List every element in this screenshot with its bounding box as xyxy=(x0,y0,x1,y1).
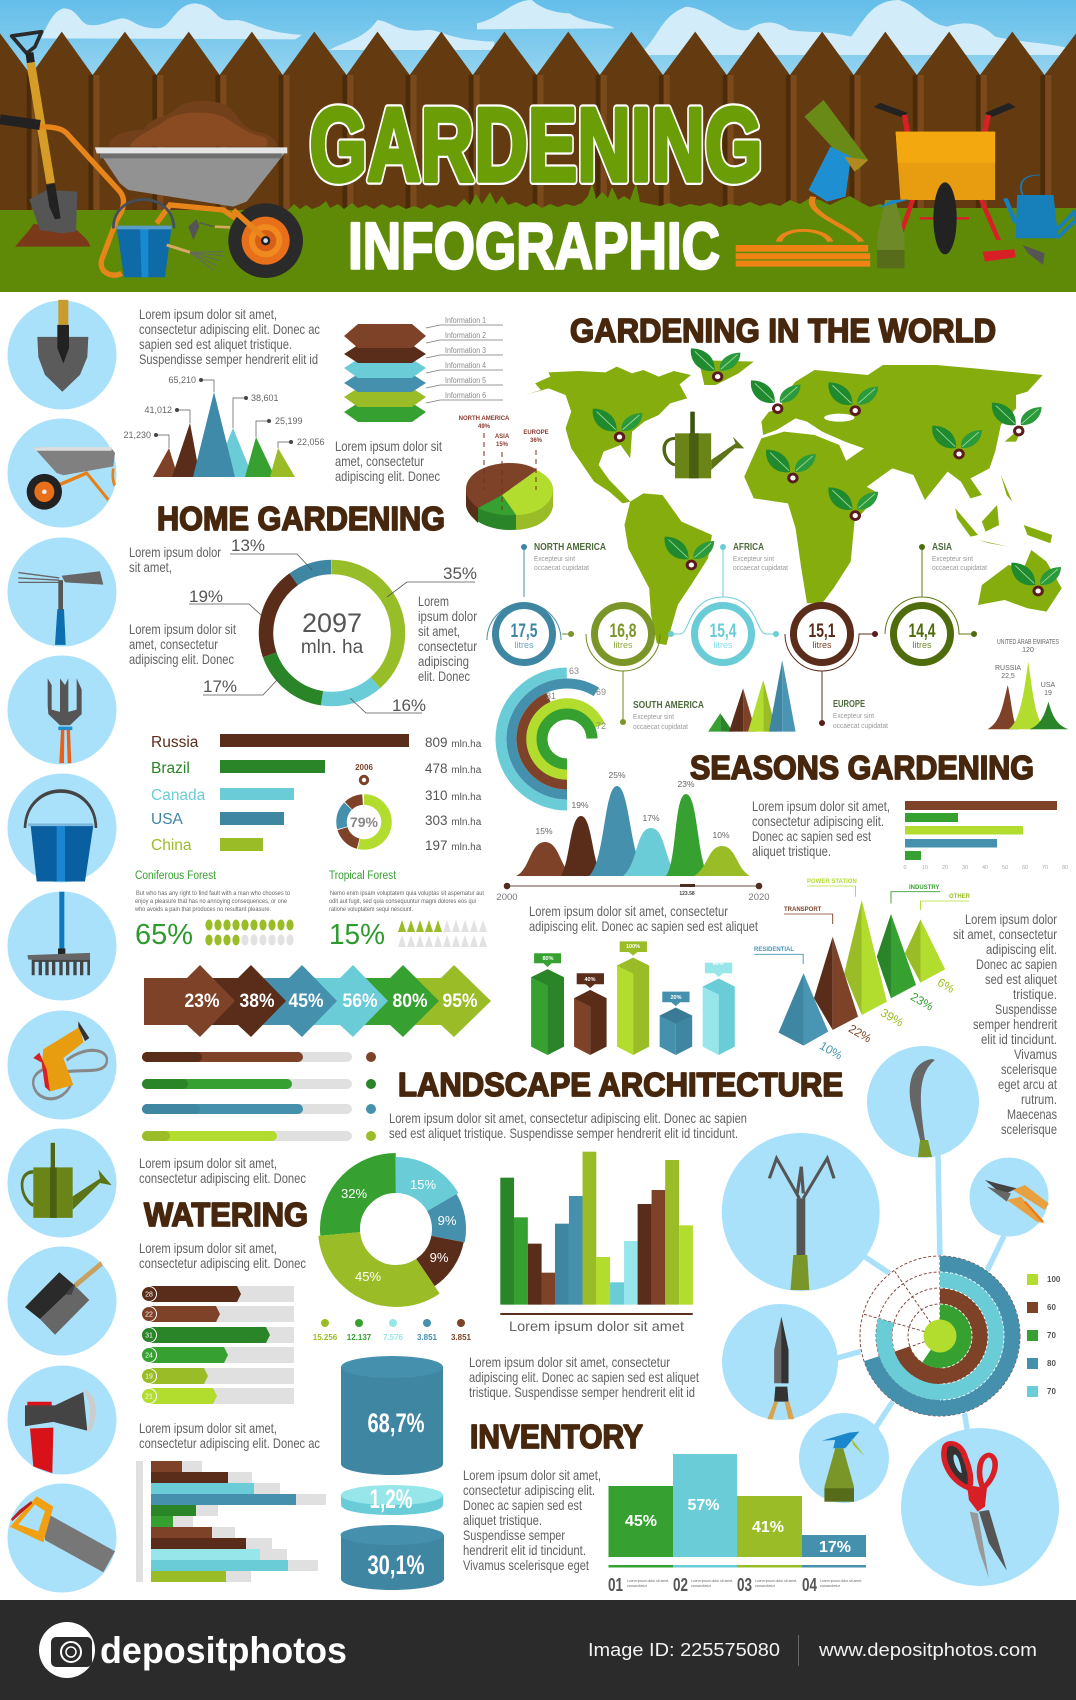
right aligned text block: scelerisque xyxy=(1001,1121,1057,1137)
heading: Landscape Architecture: LANDSCAPE ARCHITECTURE xyxy=(398,1067,843,1104)
exploded donut chart: 9% xyxy=(430,1250,449,1265)
text blocks around donut: adipiscing elit. Donec xyxy=(129,651,234,667)
text block below watering: Lorem ipsum dolor sit amet, xyxy=(139,1240,277,1256)
right aligned text block: scelerisque xyxy=(1001,1061,1057,1077)
fence xyxy=(0,32,1076,213)
continent labels: ASIA xyxy=(932,542,952,553)
connector lines xyxy=(830,1155,1004,1435)
connectors and dots xyxy=(487,547,974,723)
arrow percentage chain xyxy=(144,965,491,1037)
tropical forest panel: odit aut fugit, sed quia consequuntur magni dolores eos qui xyxy=(329,898,476,905)
concentric radial bar chart: 72 xyxy=(596,721,606,731)
donut legend xyxy=(313,1319,472,1342)
step bar chart: 04 xyxy=(802,1575,817,1595)
continent labels xyxy=(534,542,987,731)
donut chart: 2097 mln ha: 2097 xyxy=(302,608,362,638)
ring values: 15,1 xyxy=(808,621,836,642)
bell curve chart 2000-2020: 2000 xyxy=(496,892,518,903)
continent labels: Excepteur sint xyxy=(733,556,774,563)
concentric radial bar chart: 69 xyxy=(596,687,606,697)
target legend: 80 xyxy=(1047,1359,1056,1368)
pyramid chart: 22% xyxy=(846,1021,874,1046)
text block above watering xyxy=(139,1155,306,1186)
horizontal comparison bars xyxy=(136,1461,326,1582)
cylinder chart: 68,7% xyxy=(368,1408,424,1438)
plant markers xyxy=(593,348,1061,596)
litres ring row xyxy=(487,544,977,726)
text block above stacked bars: consectetur adipiscing elit. Donec ac xyxy=(139,1435,320,1451)
country bars: 478 mln.ha xyxy=(425,761,482,776)
peak chart: countries: 22,5 xyxy=(1001,673,1015,680)
peak chart: countries: 19 xyxy=(1044,690,1052,697)
horizontal bar chart: seasons: 70 xyxy=(1042,865,1048,871)
text block above stacked bars xyxy=(139,1420,320,1451)
pyramid chart: 39% xyxy=(878,1005,906,1030)
text block: seasons: Lorem ipsum dolor sit amet, xyxy=(752,798,890,814)
arrow bars with numbered badges xyxy=(142,1286,294,1404)
arrow percentage chain: 56% xyxy=(342,991,378,1012)
icons: nozzle, watering can, spade, axe, saw xyxy=(10,1021,115,1572)
layered hexagon stack with information labels: Information 6 xyxy=(445,391,486,400)
mountain chart with values: 22,056 xyxy=(297,437,325,447)
horizontal bar chart: seasons: 20 xyxy=(942,865,948,871)
text blocks around donut: adipiscing xyxy=(418,653,469,669)
mountain chart with values: 25,199 xyxy=(275,416,303,426)
horizontal bar chart: seasons: 60 xyxy=(1022,865,1028,871)
horizontal bar chart: seasons: 10 xyxy=(922,865,928,871)
country bars: Russia xyxy=(151,734,199,751)
donut chart: 2097 mln ha: 19% xyxy=(189,587,223,606)
arrow bars with numbered badges: 28 xyxy=(145,1292,153,1298)
text block below watering: consectetur adipiscing elit. Donec xyxy=(139,1255,306,1271)
text block: seasons: consectetur adipiscing elit. xyxy=(752,813,884,829)
horizontal bar chart: seasons xyxy=(903,801,1068,871)
donut legend: 7.576 xyxy=(383,1333,404,1342)
3D pie chart: 49% xyxy=(478,424,491,430)
text block: seasons: Donec ac sapien sed est xyxy=(752,828,871,844)
text blocks around donut: amet, consectetur xyxy=(129,636,218,652)
text block: intro xyxy=(139,306,320,367)
coniferous forest panel: Coniferous Forest xyxy=(135,870,217,882)
3D column chart xyxy=(531,941,735,1055)
coniferous forest panel: But who has any right to find fault with a man who chooses to xyxy=(136,890,290,897)
country bars: Brazil xyxy=(151,760,190,777)
target legend xyxy=(1027,1274,1061,1397)
3D column chart: 20% xyxy=(670,995,682,1001)
text block above columns: adipiscing elit. Donec ac sapien sed est aliquet xyxy=(529,918,758,934)
arrow bars with numbered badges: 21 xyxy=(145,1394,153,1400)
text block: inventory: aliquet tristique. xyxy=(463,1512,542,1528)
bell curve chart 2000-2020 xyxy=(496,770,770,903)
text block above inventory xyxy=(469,1354,699,1400)
heading: Seasons Gardening: SEASONS GARDENING xyxy=(690,750,1034,787)
concentric radial bar chart: 63 xyxy=(569,666,579,676)
ring values: 15,4 xyxy=(710,621,737,642)
text block: inventory: consectetur adipiscing elit. xyxy=(463,1482,595,1498)
pyramid chart: 6% xyxy=(935,975,957,996)
ring values xyxy=(510,621,936,642)
arrow percentage chain: 95% xyxy=(442,991,478,1012)
step bar chart: 41% xyxy=(752,1519,784,1536)
icon: spray bottle xyxy=(822,1432,865,1502)
peak chart: countries: RUSSIA xyxy=(995,665,1021,672)
cylinder chart: 1,2% xyxy=(370,1484,412,1514)
donut legend: 3.851 xyxy=(417,1333,438,1342)
text blocks around donut: Lorem ipsum dolor xyxy=(129,544,221,560)
step bar chart: consectetur xyxy=(627,1584,648,1588)
litres ring row: litres xyxy=(613,640,633,650)
bell curve chart 2000-2020: 25% xyxy=(608,770,626,780)
continent labels: occaecat cupidatat xyxy=(833,723,888,730)
mountain chart with values xyxy=(123,375,325,477)
donut legend: 12.137 xyxy=(347,1333,372,1342)
tropical forest panel xyxy=(329,870,487,951)
tool circles xyxy=(722,1046,1059,1586)
text block: seasons: aliquet tristique. xyxy=(752,843,831,859)
text block: intro: Lorem ipsum dolor sit amet, xyxy=(139,306,277,322)
concentric radial bar chart xyxy=(501,666,633,805)
text blocks around donut: Lorem xyxy=(418,593,449,609)
donut chart: 2097 mln ha: mln. ha xyxy=(301,637,364,658)
3D pie chart: 36% xyxy=(530,438,543,444)
layered hexagon stack with information labels: Information 3 xyxy=(445,346,486,355)
horizontal bar chart: seasons: 50 xyxy=(1002,865,1008,871)
title: INFOGRAPHIC: INFOGRAPHIC xyxy=(348,208,720,282)
text block under hexagons xyxy=(335,438,442,484)
world map xyxy=(525,348,1062,645)
3D pie chart xyxy=(459,416,553,530)
step bar chart: Lorem ipsum dolor sit amet, xyxy=(820,1579,862,1583)
bell curve chart 2000-2020: 10% xyxy=(712,830,730,840)
tropical forest panel: ratione voluptatem sequi nesciunt. xyxy=(329,906,413,913)
continent labels: occaecat cupidatat xyxy=(733,565,788,572)
concentric progress target xyxy=(859,1255,1021,1417)
pyramid chart: 23% xyxy=(908,989,936,1014)
text blocks around donut: consectetur xyxy=(418,638,477,654)
ring values: 14,4 xyxy=(908,621,936,642)
litres ring row: litres xyxy=(713,640,733,650)
heading: Home Gardening: HOME GARDENING xyxy=(157,501,445,538)
tree pictogram: coniferous xyxy=(205,920,294,946)
step bar chart: Lorem ipsum dolor sit amet, xyxy=(691,1579,733,1583)
text blocks around donut: elit. Donec xyxy=(418,668,470,684)
step bar chart: Lorem ipsum dolor sit amet, xyxy=(755,1579,797,1583)
exploded donut chart: 45% xyxy=(355,1269,381,1284)
peak chart: countries: 120 xyxy=(1022,647,1034,654)
3D column chart: 100% xyxy=(626,944,640,950)
step bar chart: 45% xyxy=(625,1513,657,1530)
country bars: Canada xyxy=(151,787,206,804)
horizontal bar chart: seasons: 80 xyxy=(1062,865,1068,871)
icons: shovel, wheelbarrow, hoe, fork, bucket, rake xyxy=(18,300,115,975)
cylinder chart xyxy=(340,1356,444,1590)
text block above watering: consectetur adipiscing elit. Donec xyxy=(139,1170,306,1186)
logo wordmark: depositphotos xyxy=(100,1630,347,1671)
text block above inventory: adipiscing elit. Donec ac sapien sed est aliquet xyxy=(469,1369,699,1385)
footer bar xyxy=(0,1600,1076,1700)
step bar chart: 17% xyxy=(819,1539,851,1556)
continent labels: Excepteur sint xyxy=(633,714,674,721)
layered hexagon stack with information labels: Information 2 xyxy=(445,331,486,340)
coniferous forest panel xyxy=(134,870,294,951)
header banner xyxy=(0,0,1076,292)
right aligned text block: rutrum. xyxy=(1021,1091,1057,1107)
pyramid chart: POWER STATION xyxy=(807,879,857,885)
step bar chart xyxy=(608,1454,866,1595)
step bar chart: 57% xyxy=(687,1497,720,1514)
3D column chart: 80% xyxy=(542,956,554,962)
text block: landscape: Lorem ipsum dolor sit amet, consectetur adipiscing elit. Donec ac sapien xyxy=(389,1110,747,1126)
text block: inventory: Vivamus scelerisque eget xyxy=(463,1557,589,1573)
country bars: 809 mln.ha xyxy=(425,735,482,750)
bell curve chart 2000-2020: 2020 xyxy=(748,892,770,903)
column of tool icons in circles xyxy=(8,300,116,1592)
bell curve chart 2000-2020: 23% xyxy=(677,779,695,789)
country bars xyxy=(151,734,482,854)
coniferous forest panel: enjoy a pleasure that has no annoying consequences, or one xyxy=(135,898,287,905)
3D pie chart: ASIA xyxy=(495,434,510,440)
arrow bars with numbered badges: 31 xyxy=(145,1332,153,1340)
target legend: 70 xyxy=(1047,1387,1056,1396)
peak chart: countries xyxy=(988,639,1069,729)
arrow percentage chain: 45% xyxy=(288,991,324,1012)
target legend: 70 xyxy=(1047,1331,1056,1340)
title: GARDENING: GARDENING xyxy=(310,88,762,204)
small donut 2006: 79% xyxy=(350,814,379,830)
continent labels: Excepteur sint xyxy=(534,556,575,563)
3D column chart: 40% xyxy=(712,961,724,967)
vertical bar chart xyxy=(500,1152,693,1334)
inland seas xyxy=(824,414,854,422)
right aligned text block: semper hendrerit xyxy=(973,1016,1057,1032)
logo icon xyxy=(39,1622,95,1678)
right aligned text block: Vivamus xyxy=(1014,1046,1057,1062)
horizontal bar chart: seasons: 40 xyxy=(982,865,988,871)
image id: Image ID: 225575080 xyxy=(588,1640,780,1660)
layered hexagon stack with information labels: Information 5 xyxy=(445,376,486,385)
icon: pruner xyxy=(985,1180,1049,1223)
pyramid chart: RESIDENTIAL xyxy=(754,947,794,953)
right aligned text block xyxy=(953,911,1057,1137)
right aligned text block: adipiscing elit. xyxy=(986,941,1057,957)
mountain chart with values: 41,012 xyxy=(144,405,172,415)
country bars: USA xyxy=(151,811,184,828)
ring values: 16,8 xyxy=(610,621,636,642)
country bars: China xyxy=(151,837,192,854)
text blocks around donut: ipsum dolor xyxy=(418,608,477,624)
tree pictogram: tropical xyxy=(398,920,487,947)
text blocks around donut: sit amet, xyxy=(418,623,460,639)
tools on the right of header xyxy=(736,100,1076,268)
text block: inventory xyxy=(463,1467,601,1573)
text block: intro: sapien sed est aliquet tristique. xyxy=(139,336,292,352)
text block above inventory: tristique. Suspendisse semper hendrerit elit id xyxy=(469,1384,695,1400)
right aligned text block: tristique. xyxy=(1013,986,1057,1002)
text block: seasons xyxy=(752,798,890,859)
layered hexagon stack with information labels: Information 4 xyxy=(445,361,486,370)
litres ring row: litres xyxy=(812,640,832,650)
coniferous forest panel: who avoids a pain that produces no resultant pleasure. xyxy=(134,906,271,913)
cylinder chart: 30,1% xyxy=(368,1550,424,1580)
donut legend: 15.256 xyxy=(313,1333,338,1342)
rings xyxy=(496,606,950,662)
text block above columns: Lorem ipsum dolor sit amet, consectetur xyxy=(529,903,728,919)
continent labels: occaecat cupidatat xyxy=(932,565,987,572)
donut chart: 2097 mln ha: 13% xyxy=(231,536,265,555)
watering can on map xyxy=(664,412,744,478)
right aligned text block: eget arcu at xyxy=(998,1076,1057,1092)
text block under hexagons: Lorem ipsum dolor sit xyxy=(335,438,442,454)
target legend: 60 xyxy=(1047,1303,1056,1312)
progress bars xyxy=(142,1052,376,1141)
continent labels: occaecat cupidatat xyxy=(633,724,688,731)
continent labels: NORTH AMERICA xyxy=(534,542,606,553)
text block: intro: consectetur adipiscing elit. Donec ac xyxy=(139,321,320,337)
3D pie chart: NORTH AMERICA xyxy=(459,416,510,422)
exploded donut chart xyxy=(339,1172,457,1286)
small triangle chart xyxy=(708,660,796,732)
text block: inventory: Lorem ipsum dolor sit amet, xyxy=(463,1467,601,1483)
continent labels: EUROPE xyxy=(833,699,865,710)
litres ring row: litres xyxy=(514,640,534,650)
donut legend: 3.851 xyxy=(451,1333,472,1342)
continent labels: Excepteur sint xyxy=(932,556,973,563)
country bars: 197 mln.ha xyxy=(425,838,482,853)
text block: landscape xyxy=(389,1110,747,1141)
arrow percentage chain: 80% xyxy=(392,991,428,1012)
icon: hand rake xyxy=(769,1158,834,1290)
mountain chart with values: 38,601 xyxy=(251,393,279,403)
text block: inventory: Suspendisse semper xyxy=(463,1527,565,1543)
exploded donut chart: 9% xyxy=(438,1213,457,1228)
exploded donut chart: 15% xyxy=(410,1177,436,1192)
right aligned text block: Suspendisse xyxy=(995,1001,1057,1017)
pyramid chart xyxy=(754,879,971,1063)
continent labels: SOUTH AMERICA xyxy=(633,700,704,711)
tropical forest panel: 15% xyxy=(329,919,385,951)
text block: intro: Suspendisse semper hendrerit elit id xyxy=(139,351,318,367)
text blocks around donut xyxy=(129,544,477,684)
lawn xyxy=(0,183,1076,292)
arrow percentage chain: 23% xyxy=(184,991,220,1012)
title: GARDENING: GARDENING xyxy=(310,88,762,204)
pyramid chart: TRANSPORT xyxy=(784,907,822,913)
small donut 2006 xyxy=(342,763,386,844)
exploded donut chart: 32% xyxy=(341,1186,367,1201)
heading: Gardening in the World: GARDENING IN THE WORLD xyxy=(570,313,996,350)
3D pie chart: EUROPE xyxy=(523,430,549,436)
website url: www.depositphotos.com xyxy=(818,1640,1037,1660)
vertical bar chart: Lorem ipsum dolor sit amet xyxy=(509,1318,684,1334)
3D pie chart: 15% xyxy=(496,442,509,448)
pyramid chart: 10% xyxy=(817,1038,845,1063)
continent labels: occaecat cupidatat xyxy=(534,565,589,572)
country bars: 303 mln.ha xyxy=(425,813,482,828)
right aligned text block: Maecenas xyxy=(1007,1106,1057,1122)
circle backgrounds xyxy=(8,300,116,1592)
layered hexagon stack with information labels xyxy=(344,316,503,422)
text blocks around donut: sit amet, xyxy=(129,559,172,575)
arrow bars with numbered badges: 19 xyxy=(145,1374,153,1380)
step bar chart: 02 xyxy=(673,1575,688,1595)
horizontal bar chart: seasons: 30 xyxy=(962,865,968,871)
text block: landscape: sed est aliquet tristique. Suspendisse semper hendrerit elit id tincidunt. xyxy=(389,1125,738,1141)
bell curve chart 2000-2020: 15% xyxy=(535,826,553,836)
text block under hexagons: adipiscing elit. Donec xyxy=(335,468,440,484)
text block above watering: Lorem ipsum dolor sit amet, xyxy=(139,1155,277,1171)
3D column chart: 40% xyxy=(584,977,596,983)
sky xyxy=(0,0,1076,150)
text block: inventory: hendrerit elit id tincidunt. xyxy=(463,1542,586,1558)
arrow bars with numbered badges: 22 xyxy=(145,1312,153,1318)
clouds xyxy=(41,0,1076,55)
icon: scissors xyxy=(944,1443,1007,1578)
litres ring row: litres xyxy=(912,640,932,650)
icon: sickle xyxy=(910,1059,935,1157)
tools on the left of header xyxy=(0,32,303,278)
step bar chart: 01 xyxy=(608,1575,623,1595)
donut chart: 2097 mln ha: 35% xyxy=(443,564,477,583)
donut chart: 2097 mln ha xyxy=(189,536,477,715)
text block above columns xyxy=(529,903,758,934)
donut chart: 2097 mln ha: 16% xyxy=(392,696,426,715)
step bar chart: consectetur xyxy=(691,1584,712,1588)
mountain chart with values: 65,210 xyxy=(168,375,196,385)
arrow percentage chain: 38% xyxy=(240,991,275,1012)
horizontal bar chart: seasons: 0 xyxy=(903,865,907,871)
icon: hedge shears xyxy=(767,1317,794,1419)
pyramid chart: OTHER xyxy=(949,894,971,900)
tropical forest panel: Nemo enim ipsam voluptatem quia voluptas sit aspernatur aut xyxy=(330,890,484,897)
pyramid chart: INDUSTRY xyxy=(909,885,939,891)
peak chart: countries: USA xyxy=(1041,682,1056,689)
continent labels: AFRICA xyxy=(733,542,764,553)
text block above inventory: Lorem ipsum dolor sit amet, consectetur xyxy=(469,1354,670,1370)
continent labels: Excepteur sint xyxy=(833,713,874,720)
text block: inventory: Donec ac sapien sed est xyxy=(463,1497,582,1513)
step bar chart: consectetur xyxy=(820,1584,841,1588)
ring values: 17,5 xyxy=(510,621,538,642)
bell curve chart 2000-2020: 123.58 xyxy=(679,891,695,897)
landscape tools network xyxy=(722,1046,1061,1586)
target legend: 100 xyxy=(1047,1275,1061,1284)
arrow bars with numbered badges: 24 xyxy=(145,1352,153,1360)
heading: Inventory: INVENTORY xyxy=(470,1419,643,1456)
mountain chart with values: 21,230 xyxy=(123,430,151,440)
right aligned text block: elit id tincidunt. xyxy=(981,1031,1057,1047)
text blocks around donut: Lorem ipsum dolor sit xyxy=(129,621,236,637)
right aligned text block: sed est aliquet xyxy=(985,971,1057,987)
small donut 2006: 2006 xyxy=(355,763,373,772)
bell curve chart 2000-2020: 19% xyxy=(571,800,589,810)
heading: Watering: WATERING xyxy=(144,1197,308,1234)
text block above stacked bars: Lorem ipsum dolor sit amet, xyxy=(139,1420,277,1436)
coniferous forest panel: 65% xyxy=(135,919,193,951)
country bars: 310 mln.ha xyxy=(425,788,482,803)
step bar chart: consectetur xyxy=(755,1584,776,1588)
donut chart: 2097 mln ha: 17% xyxy=(203,677,237,696)
layered hexagon stack with information labels: Information 1 xyxy=(445,316,486,325)
text block below watering xyxy=(139,1240,306,1271)
tropical forest panel: Tropical Forest xyxy=(329,870,397,882)
concentric radial bar chart: 31 xyxy=(546,691,556,701)
text block under hexagons: amet, consectetur xyxy=(335,453,424,469)
bell curve chart 2000-2020: 17% xyxy=(642,813,660,823)
step bar chart: Lorem ipsum dolor sit amet, xyxy=(627,1579,669,1583)
step bar chart: 03 xyxy=(737,1575,752,1595)
